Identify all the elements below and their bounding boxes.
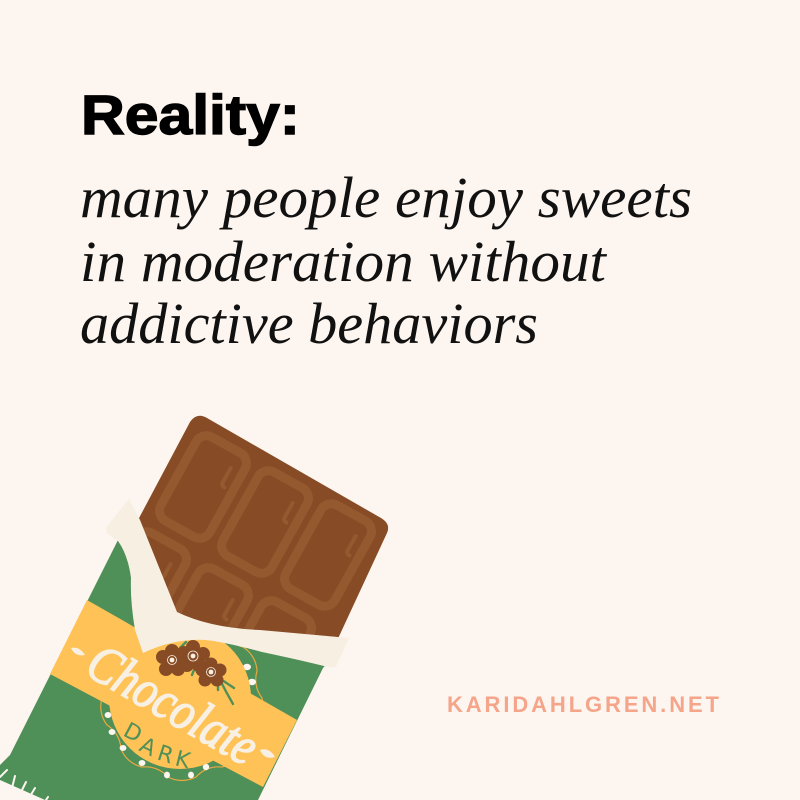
yellow medallion centre (109, 627, 251, 769)
text block: reality statement (80, 165, 692, 356)
medallion dots (105, 664, 256, 778)
text block: reality statement: in moderation without (80, 229, 608, 294)
heading: Reality: (81, 83, 300, 146)
flowers (156, 640, 226, 686)
text block: reality statement: addictive behaviors (80, 291, 538, 356)
website credit: KARIDAHLGREN.NET (447, 692, 720, 717)
text block: reality statement: many people enjoy sweets (80, 165, 692, 230)
green wrapper (0, 540, 335, 800)
torn foil wrapper (106, 499, 349, 668)
band label: Chocolate: Chocolate (77, 631, 269, 777)
wrapper fringe (0, 770, 48, 800)
band end ornaments (71, 648, 275, 758)
illustration: chocolate bar (0, 416, 388, 800)
yellow label band (50, 600, 297, 787)
floral leaves (176, 642, 234, 704)
label: DARK: DARK (119, 718, 193, 774)
scalloped medallion (100, 646, 264, 782)
chocolate block (95, 416, 388, 708)
